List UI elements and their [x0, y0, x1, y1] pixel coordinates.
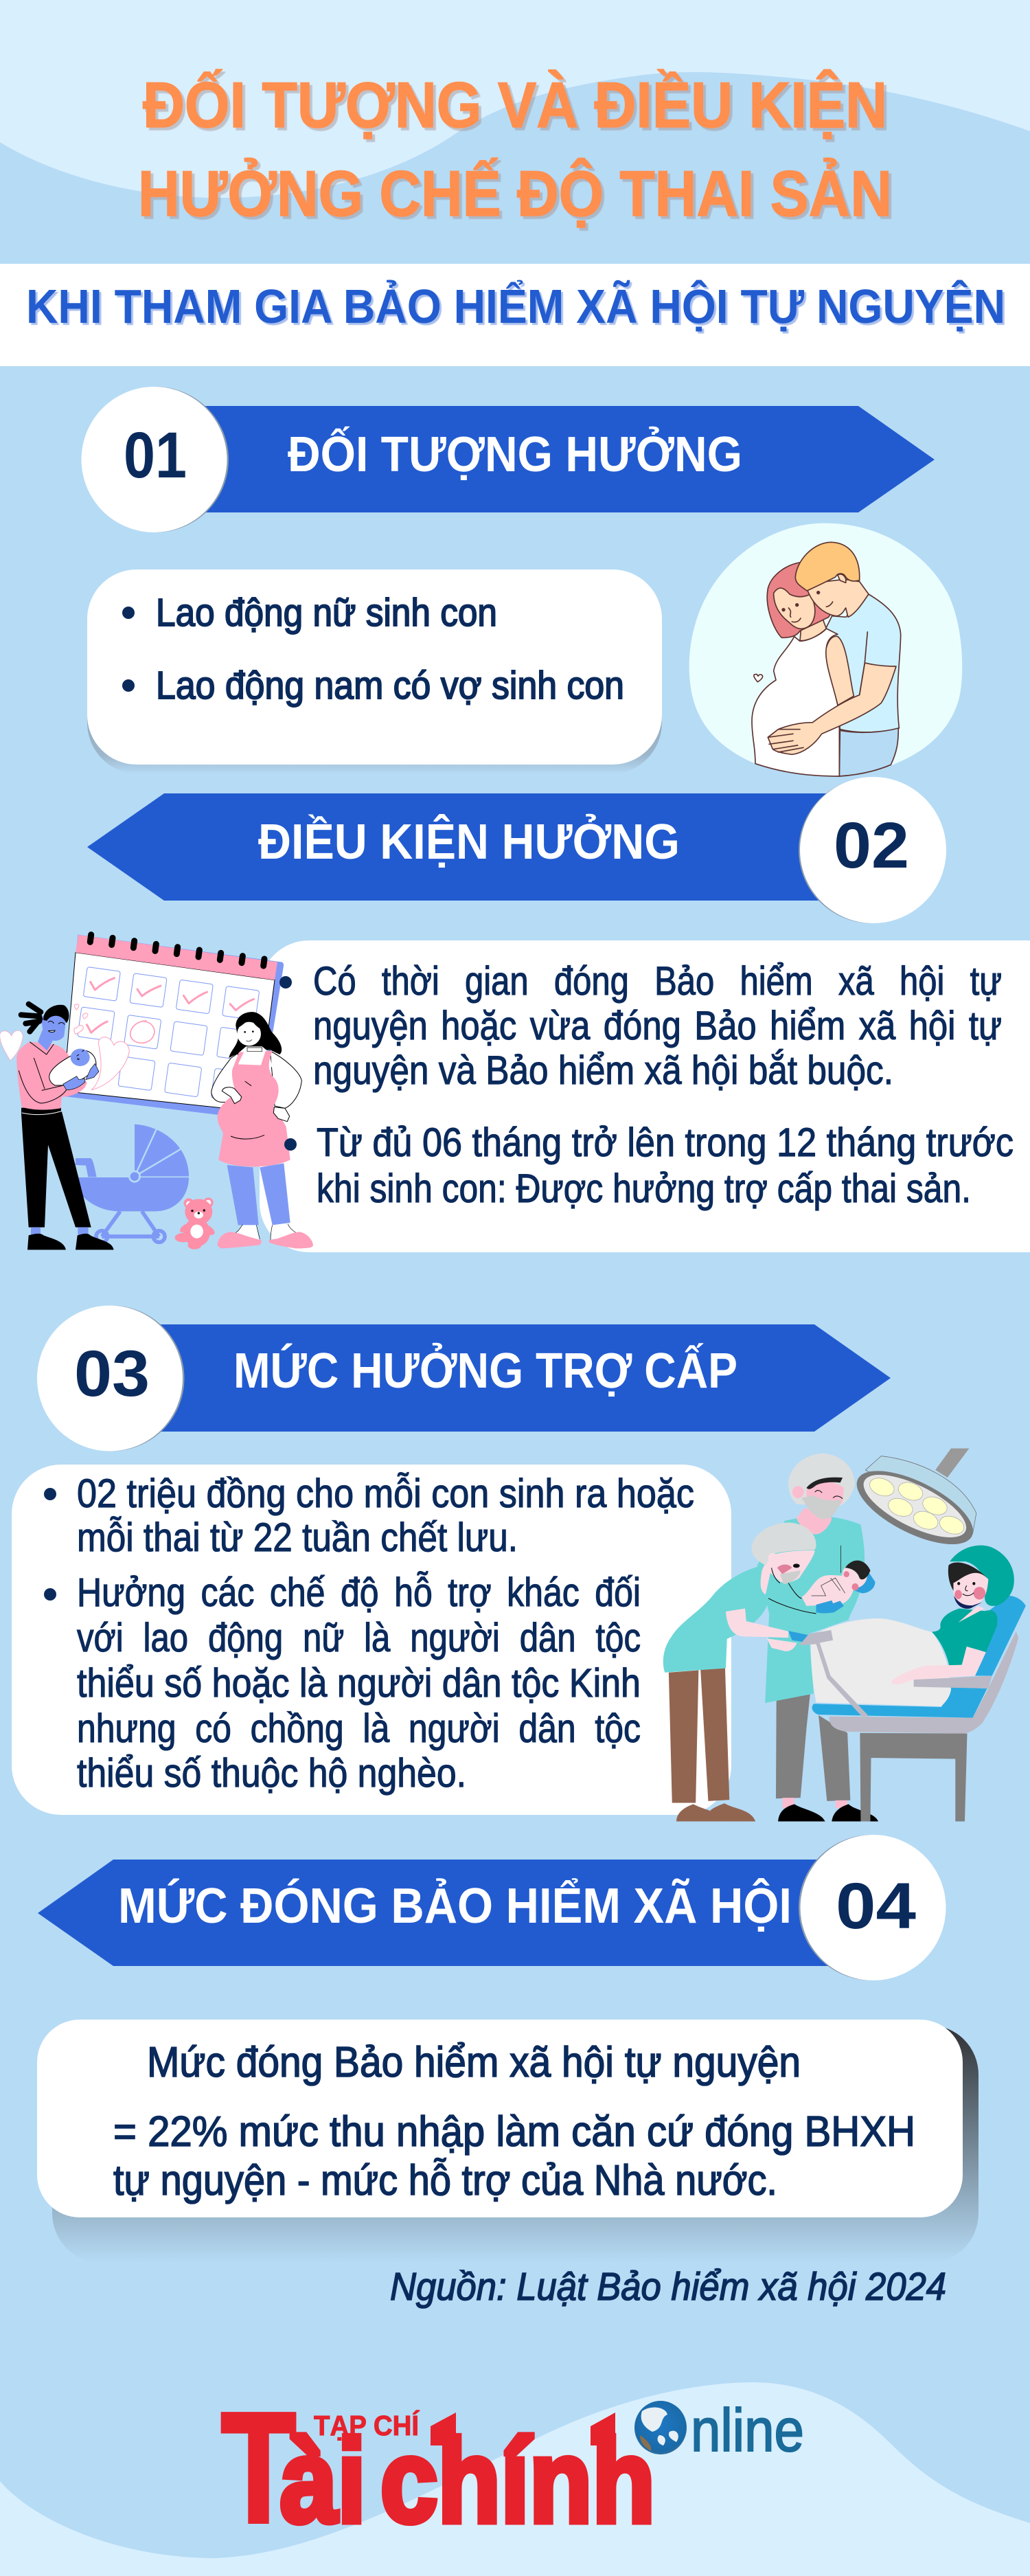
panel: benefit card: 02 triệu đồng cho mỗi con sinh ra hoặc: [77, 1471, 694, 1516]
illustration: parents with calendar and stroller: [0, 935, 313, 1250]
logo: Tạp chí Tài chính Online: nline: [691, 2396, 804, 2464]
section 04 header: 04: [836, 1870, 916, 1943]
section 02 header: [87, 777, 946, 923]
logo: Tạp chí Tài chính Online: TẠP CHÍ: [314, 2410, 420, 2441]
panel: benefit card: thiểu số hoặc là người dân tộc Kinh: [77, 1661, 641, 1706]
illustration: expecting couple: [689, 523, 962, 776]
delivery chair and patient: [799, 1546, 1026, 1822]
section 02 header: 02: [834, 809, 909, 882]
pregnant woman: [211, 1012, 313, 1248]
top wave: [0, 0, 1030, 198]
bottom wave: [0, 2382, 1030, 2576]
conditions text: nguyện và Bảo hiểm xã hội bắt buộc.: [313, 1048, 893, 1093]
section 03 header: 03: [74, 1337, 150, 1410]
icon: teddy bear: [175, 1197, 216, 1250]
subtitle band: [0, 264, 1030, 366]
section 04 header: [38, 1835, 946, 1980]
section 01 header: 01: [124, 419, 187, 492]
title: ĐỐI TƯỢNG VÀ ĐIỀU KIỆN: [143, 69, 887, 141]
panel: benefit card: nhưng có chồng là người dân tộc: [77, 1706, 641, 1751]
section 02 header: ĐIỀU KIỆN HƯỞNG: [258, 814, 680, 870]
icon: stroller: [76, 1125, 189, 1242]
conditions text: [279, 959, 1014, 1211]
panel: benefit card: [12, 1465, 731, 1815]
source note: Nguồn: Luật Bảo hiểm xã hội 2024: [390, 2265, 946, 2309]
section 01 header: [81, 387, 935, 532]
panel: benefit card: Hưởng các chế độ hỗ trợ khác đối: [77, 1570, 641, 1615]
logo: Tạp chí Tài chính Online: ài: [280, 2415, 366, 2547]
panel: benefit card: mỗi thai từ 22 tuần chết lưu.: [77, 1515, 518, 1560]
title: [138, 69, 892, 229]
section 03 header: MỨC HƯỞNG TRỢ CẤP: [233, 1343, 737, 1399]
baby: [801, 1561, 875, 1613]
midwife holding baby: [757, 1454, 878, 1822]
section 03 header: [37, 1305, 891, 1451]
logo: Tạp chí Tài chính Online: [221, 2381, 804, 2555]
section 04 header: MỨC ĐÓNG BẢO HIỂM XÃ HỘI: [118, 1878, 792, 1934]
logo: Tạp chí Tài chính Online: T: [221, 2381, 296, 2555]
panel: benefit card: thiểu số thuộc hộ nghèo.: [77, 1751, 466, 1796]
panel: recipients card: Lao động nam có vợ sinh con: [156, 664, 624, 708]
title: HƯỞNG CHẾ ĐỘ THAI SẢN: [138, 157, 892, 229]
calendar: [62, 935, 284, 1120]
panel: contribution card: [37, 2020, 978, 2263]
logo: Tạp chí Tài chính Online: chính: [380, 2415, 655, 2547]
panel: contribution card: Mức đóng Bảo hiểm xã hội tự nguyện: [147, 2039, 801, 2086]
illustration: delivery room: [663, 1448, 1026, 1822]
panel: contribution card: tự nguyện - mức hỗ trợ của Nhà nước.: [113, 2157, 777, 2204]
surgical lamp: [847, 1448, 983, 1559]
panel: recipients card: Lao động nữ sinh con: [156, 591, 497, 635]
section 01 header: ĐỐI TƯỢNG HƯỞNG: [288, 426, 742, 482]
doctor: [663, 1522, 816, 1822]
man holding baby: [0, 1004, 129, 1250]
panel: contribution card: = 22% mức thu nhập làm căn cứ đóng BHXH: [113, 2108, 915, 2156]
panel: benefit card: với lao động nữ là người dân tộc: [77, 1616, 641, 1660]
panel: conditions card: [260, 940, 1030, 1252]
panel: recipients card: [87, 569, 662, 774]
